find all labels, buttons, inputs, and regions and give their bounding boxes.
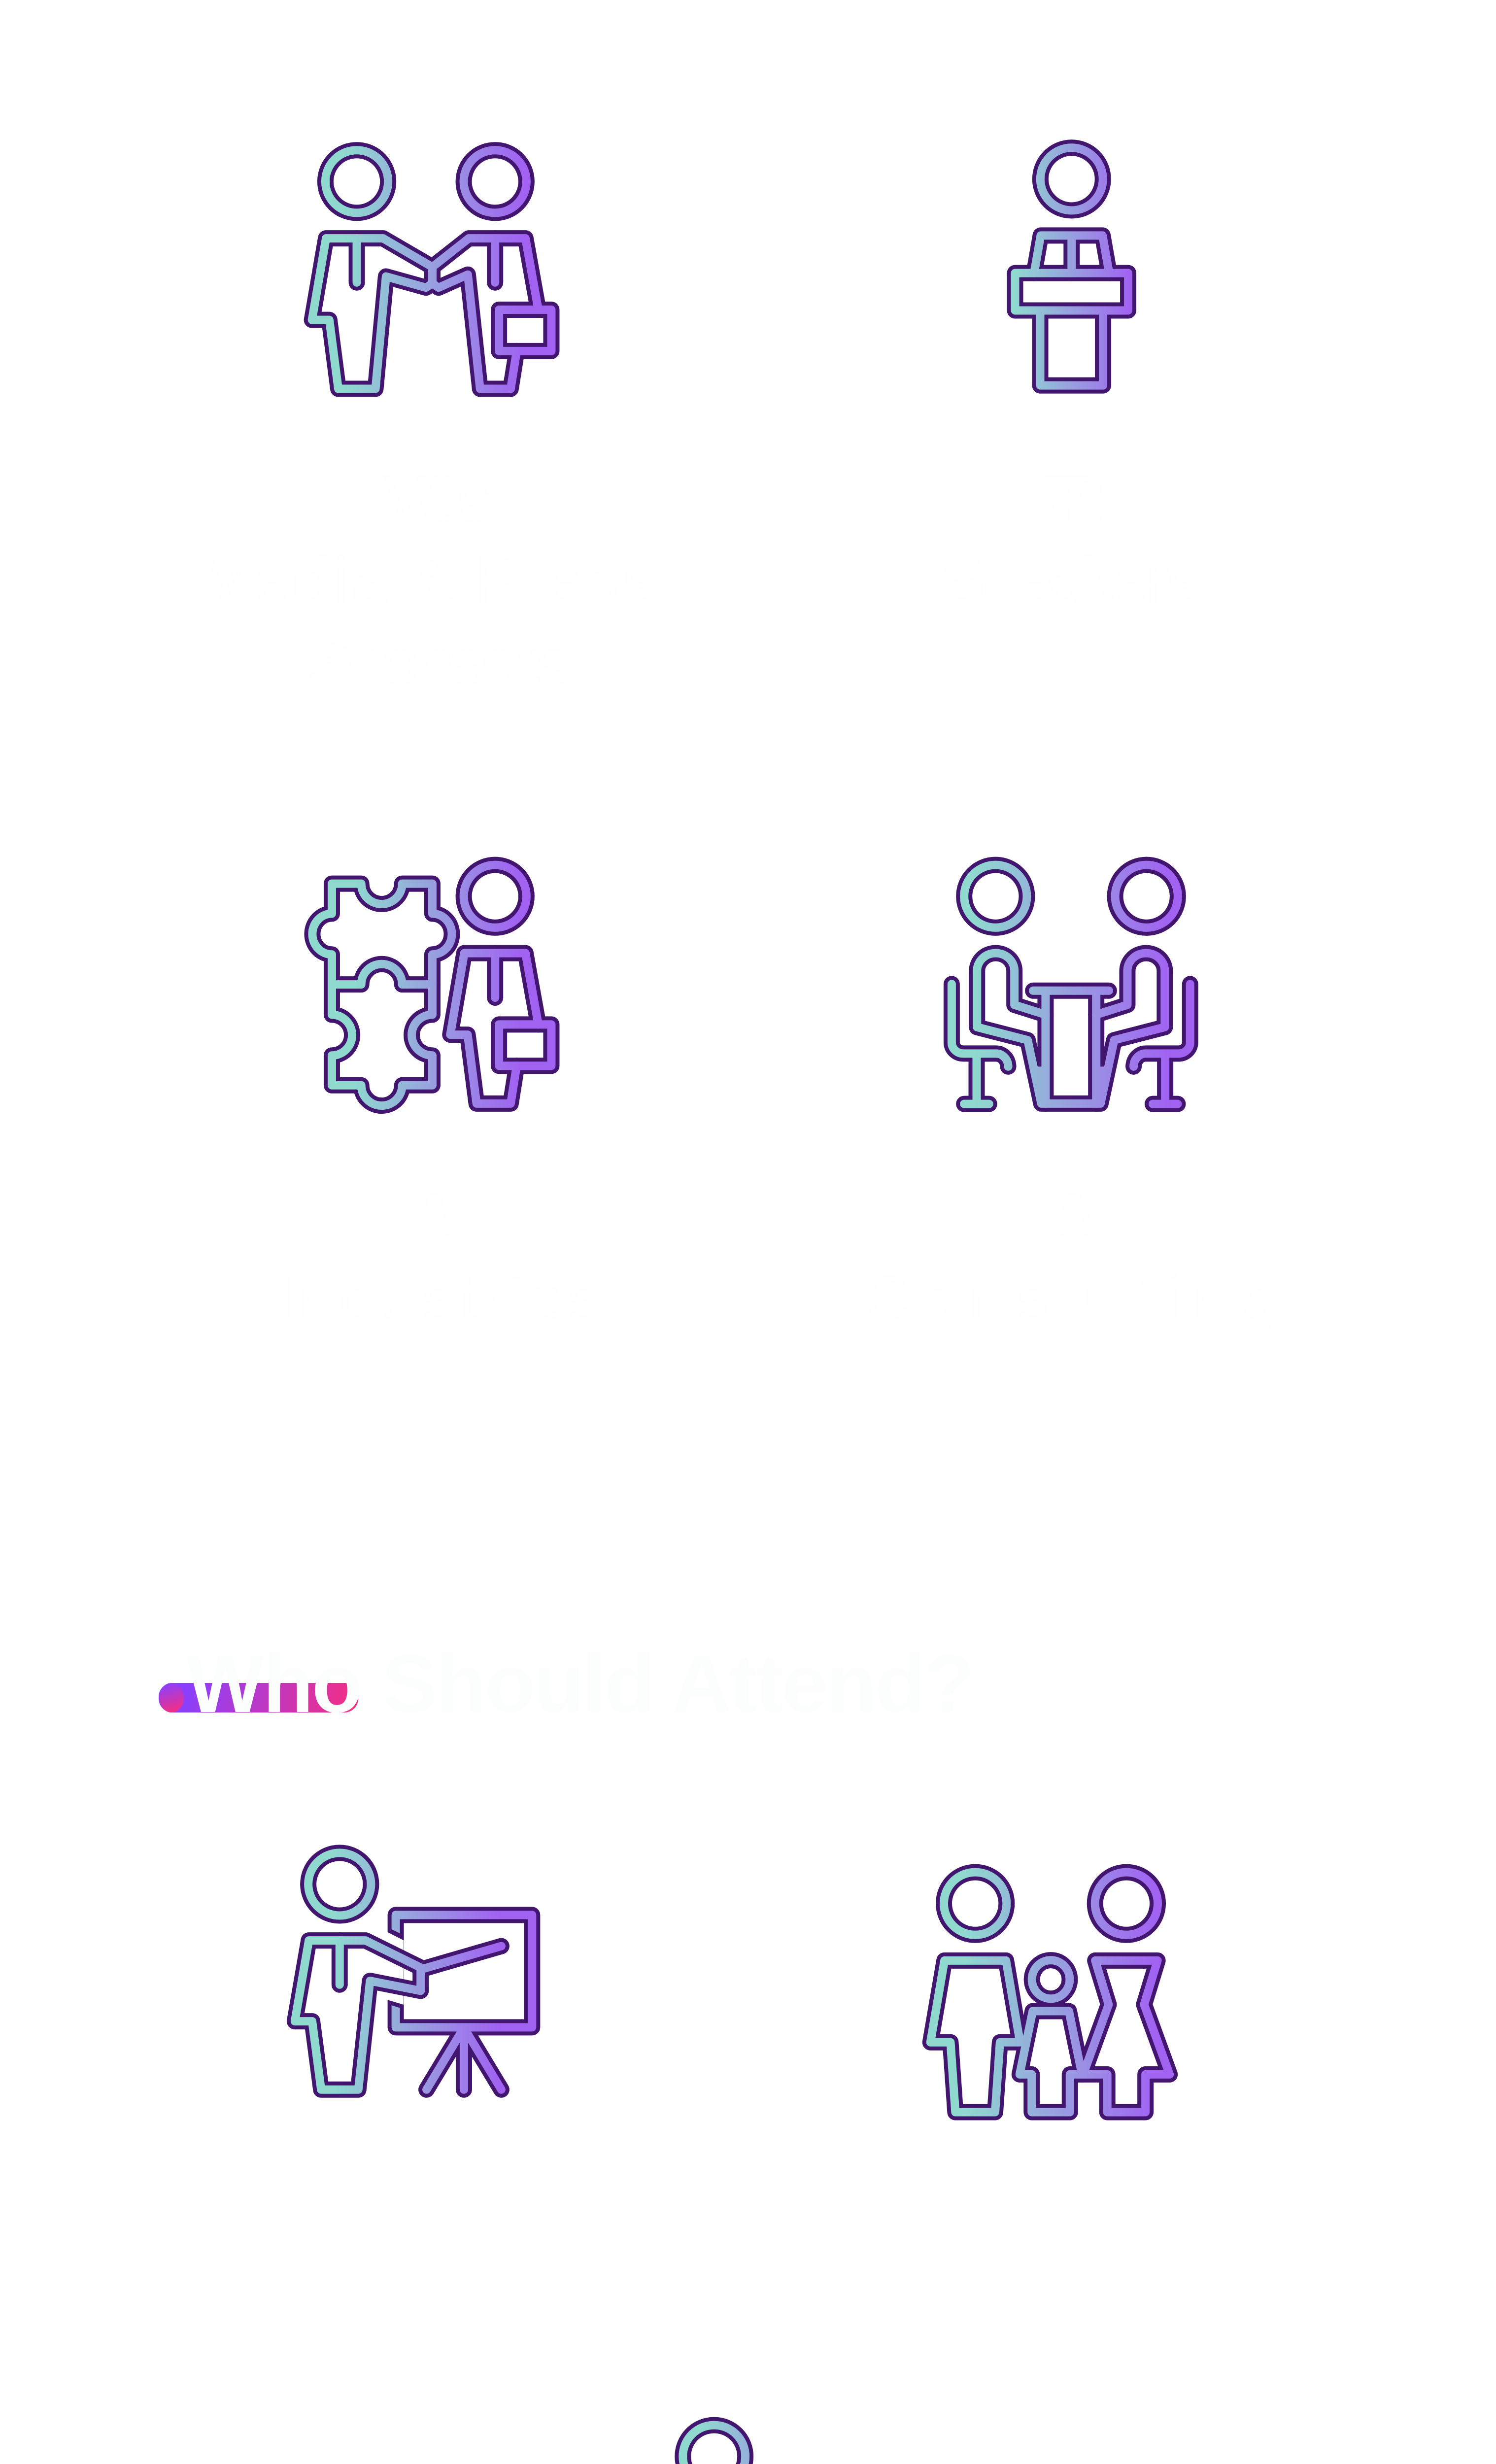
puzzle outline layer [312, 865, 551, 1106]
meeting gradient layer [952, 865, 1190, 1104]
handshake outline layer [312, 150, 551, 389]
icon: presenter at a board [295, 1853, 532, 2089]
icon: two people seated at a table [952, 865, 1190, 1104]
family outline layer [930, 1872, 1170, 2112]
heading pill: gradient highlight behind Who [159, 1683, 358, 1712]
family gradient layer [930, 1872, 1170, 2112]
icon: person with puzzle pieces [312, 865, 551, 1106]
icon: family of three [930, 1872, 1170, 2112]
presenter gradient layer [295, 1853, 532, 2089]
meeting outline layer [952, 865, 1190, 1104]
label: second row right, line 1: & [1050, 1178, 1096, 1250]
label: first row left, line 3: Sponsors [306, 622, 572, 700]
icon: two people shaking hands [312, 150, 551, 389]
podium outline layer [1015, 148, 1128, 385]
label: first row left, line 2: Media & Press [196, 541, 658, 618]
infographic canvas [159, 139, 1198, 2464]
label: first row right, line 1: PR [1040, 460, 1106, 537]
label: first row right, line 2: Speakers [940, 541, 1202, 618]
puzzle gradient layer [312, 865, 551, 1106]
label: second row right, line 2: Consulting [863, 1262, 1278, 1334]
label: second row left, line 1: & [410, 1178, 456, 1250]
presenter outline layer [295, 1853, 532, 2089]
heading: Who Should Attend?: Who Should Attend? [186, 1637, 975, 1730]
bulb gradient layer [679, 2421, 750, 2464]
bulb outline layer [675, 2417, 754, 2464]
icon: speaker at podium [1015, 148, 1128, 385]
podium gradient layer [1015, 148, 1128, 385]
label: second row left, line 2: Industries [276, 1262, 601, 1334]
label: first row left, line 1: VCs [382, 460, 493, 537]
handshake gradient layer [312, 150, 551, 389]
icon: person with light bulb [675, 2417, 754, 2464]
